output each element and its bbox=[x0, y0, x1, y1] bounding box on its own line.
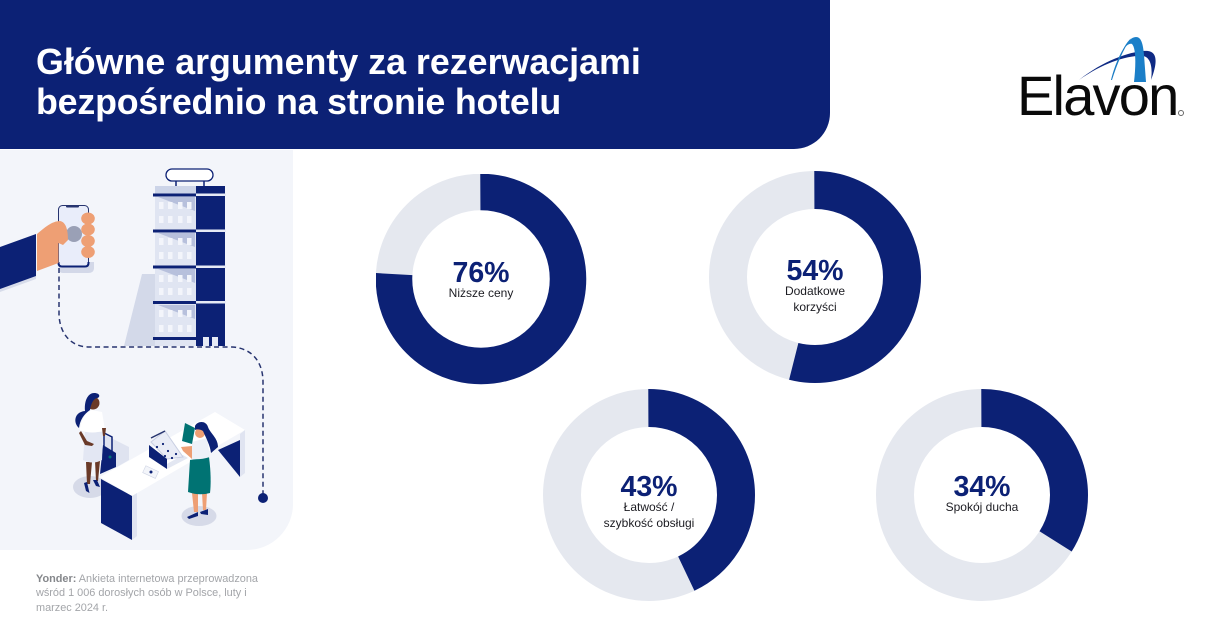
source note: marzec 2024 r. bbox=[36, 602, 108, 614]
panel: illustration bbox=[0, 150, 293, 550]
source note: wśród 1 006 dorosłych osób w Polsce, luty i bbox=[36, 587, 247, 599]
donut chart: 76% bbox=[376, 174, 586, 384]
donut chart: 76%: 76% bbox=[452, 257, 510, 289]
illustration: booking journey bbox=[0, 168, 268, 540]
donut chart: 43% bbox=[543, 389, 755, 601]
desk bbox=[100, 412, 245, 496]
donut chart: 43%: 43% bbox=[620, 471, 678, 503]
header banner bbox=[0, 0, 830, 149]
icon: logo arches bbox=[1079, 37, 1156, 82]
source note bbox=[36, 573, 258, 614]
donut chart: 54%: 54% bbox=[786, 255, 844, 287]
donut chart: 54%: korzyści bbox=[793, 300, 837, 314]
donut chart: 43%: Łatwość / bbox=[624, 500, 674, 514]
icon: reception scene bbox=[73, 393, 245, 540]
donut chart: 34%: Spokój ducha bbox=[946, 500, 1018, 514]
hotel windows bbox=[159, 202, 192, 332]
donut chart: 54% bbox=[709, 171, 921, 383]
donut chart: 34%: 34% bbox=[953, 471, 1011, 503]
title: Główne argumenty za rezerwacjami bbox=[36, 42, 641, 82]
suitcase bbox=[105, 435, 129, 470]
donut chart: 34% bbox=[876, 389, 1088, 601]
donut chart: 54%: Dodatkowe bbox=[785, 284, 845, 298]
icon: path end dot bbox=[258, 493, 268, 503]
guest bbox=[86, 461, 100, 484]
source note: Yonder: Ankieta internetowa przeprowadzona bbox=[36, 573, 258, 585]
dashed path bbox=[59, 268, 263, 494]
donut chart: 43%: szybkość obsługi bbox=[604, 516, 694, 530]
title bbox=[36, 42, 641, 122]
title: bezpośrednio na stronie hotelu bbox=[36, 82, 561, 122]
icon: hand holding phone bbox=[0, 205, 95, 292]
logo: Elavon bbox=[1017, 37, 1184, 125]
donut chart: 76%: Niższe ceny bbox=[449, 286, 513, 300]
till bbox=[165, 455, 188, 469]
clerk bbox=[192, 493, 207, 512]
icon: hotel building bbox=[124, 169, 226, 347]
hotel rooftop sign bbox=[166, 169, 213, 181]
